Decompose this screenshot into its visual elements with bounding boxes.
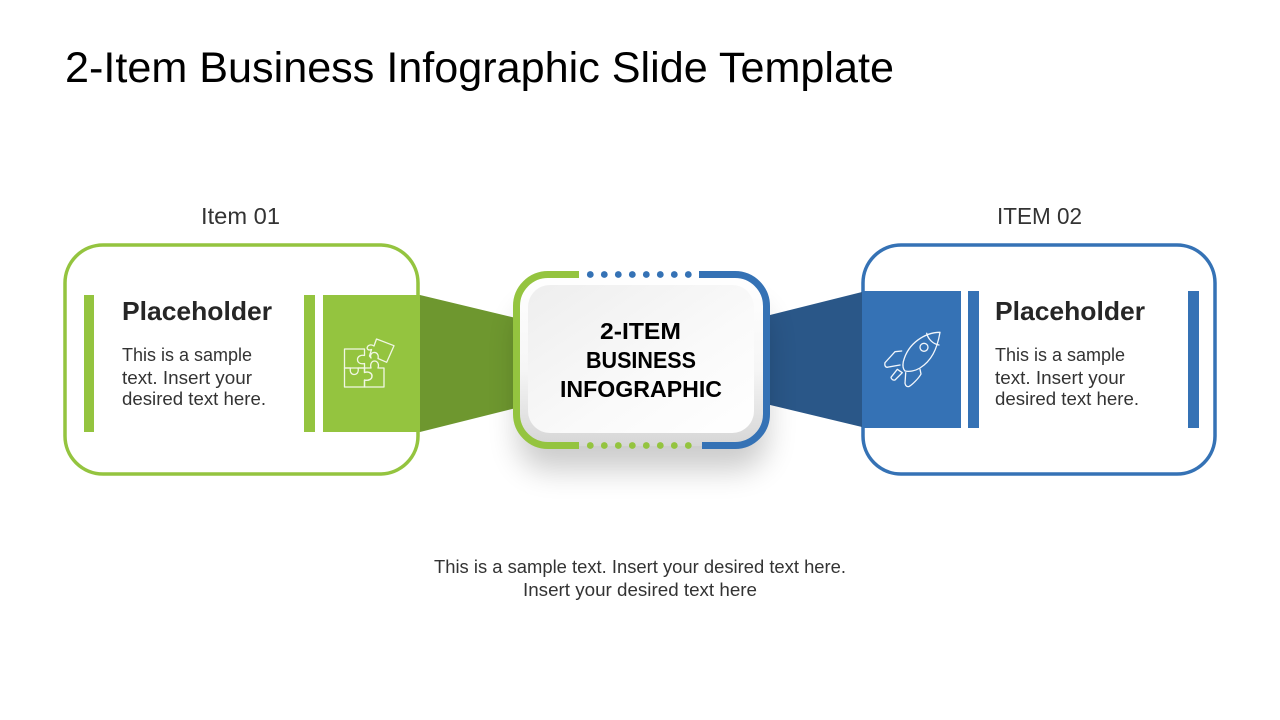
badge blue frame (699, 274, 766, 446)
item 01 icon block (323, 295, 420, 432)
item 02 icon block (862, 291, 961, 428)
item 01 body text: desired text here. (122, 389, 266, 409)
footer text: This is a sample text. Insert your desired text here. (434, 556, 846, 577)
item 02 body text: text. Insert your (995, 368, 1125, 388)
item 01 right bar (304, 295, 315, 432)
badge text: 2-ITEM (600, 318, 681, 344)
panel: item 02 (766, 203, 1215, 474)
item 02 label: ITEM 02 (997, 203, 1082, 229)
bottom dots (587, 442, 692, 449)
badge shadow (518, 305, 767, 470)
item 01 left bar (84, 295, 94, 432)
item 02 bar one (968, 291, 979, 428)
item 01 heading: Placeholder (122, 296, 272, 326)
icon: rocket (885, 332, 940, 387)
item 01 body text: This is a sample (122, 345, 252, 365)
item 02 body text: This is a sample (995, 345, 1125, 365)
panel: item 01 (65, 203, 516, 474)
badge ring fill (516, 274, 767, 446)
panel: center badge (516, 271, 767, 470)
item 01 outline (65, 245, 418, 474)
footer text: Insert your desired text here (523, 579, 757, 600)
item 02 outline (863, 245, 1215, 474)
badge text: INFOGRAPHIC (560, 376, 722, 402)
item 01 label: Item 01 (201, 203, 280, 229)
badge inner card (528, 285, 754, 433)
item 02 heading: Placeholder (995, 296, 1145, 326)
icon: puzzle (344, 339, 394, 387)
title: 2-Item Business Infographic Slide Template (65, 44, 894, 92)
item 01 body text: text. Insert your (122, 368, 252, 388)
badge green frame (516, 274, 579, 446)
top dots (587, 271, 692, 278)
item 02 body text: desired text here. (995, 389, 1139, 409)
item 02 bar two (1188, 291, 1199, 428)
item 02 connector (766, 292, 862, 427)
badge text: BUSINESS (586, 347, 696, 373)
item 01 connector (420, 295, 516, 432)
